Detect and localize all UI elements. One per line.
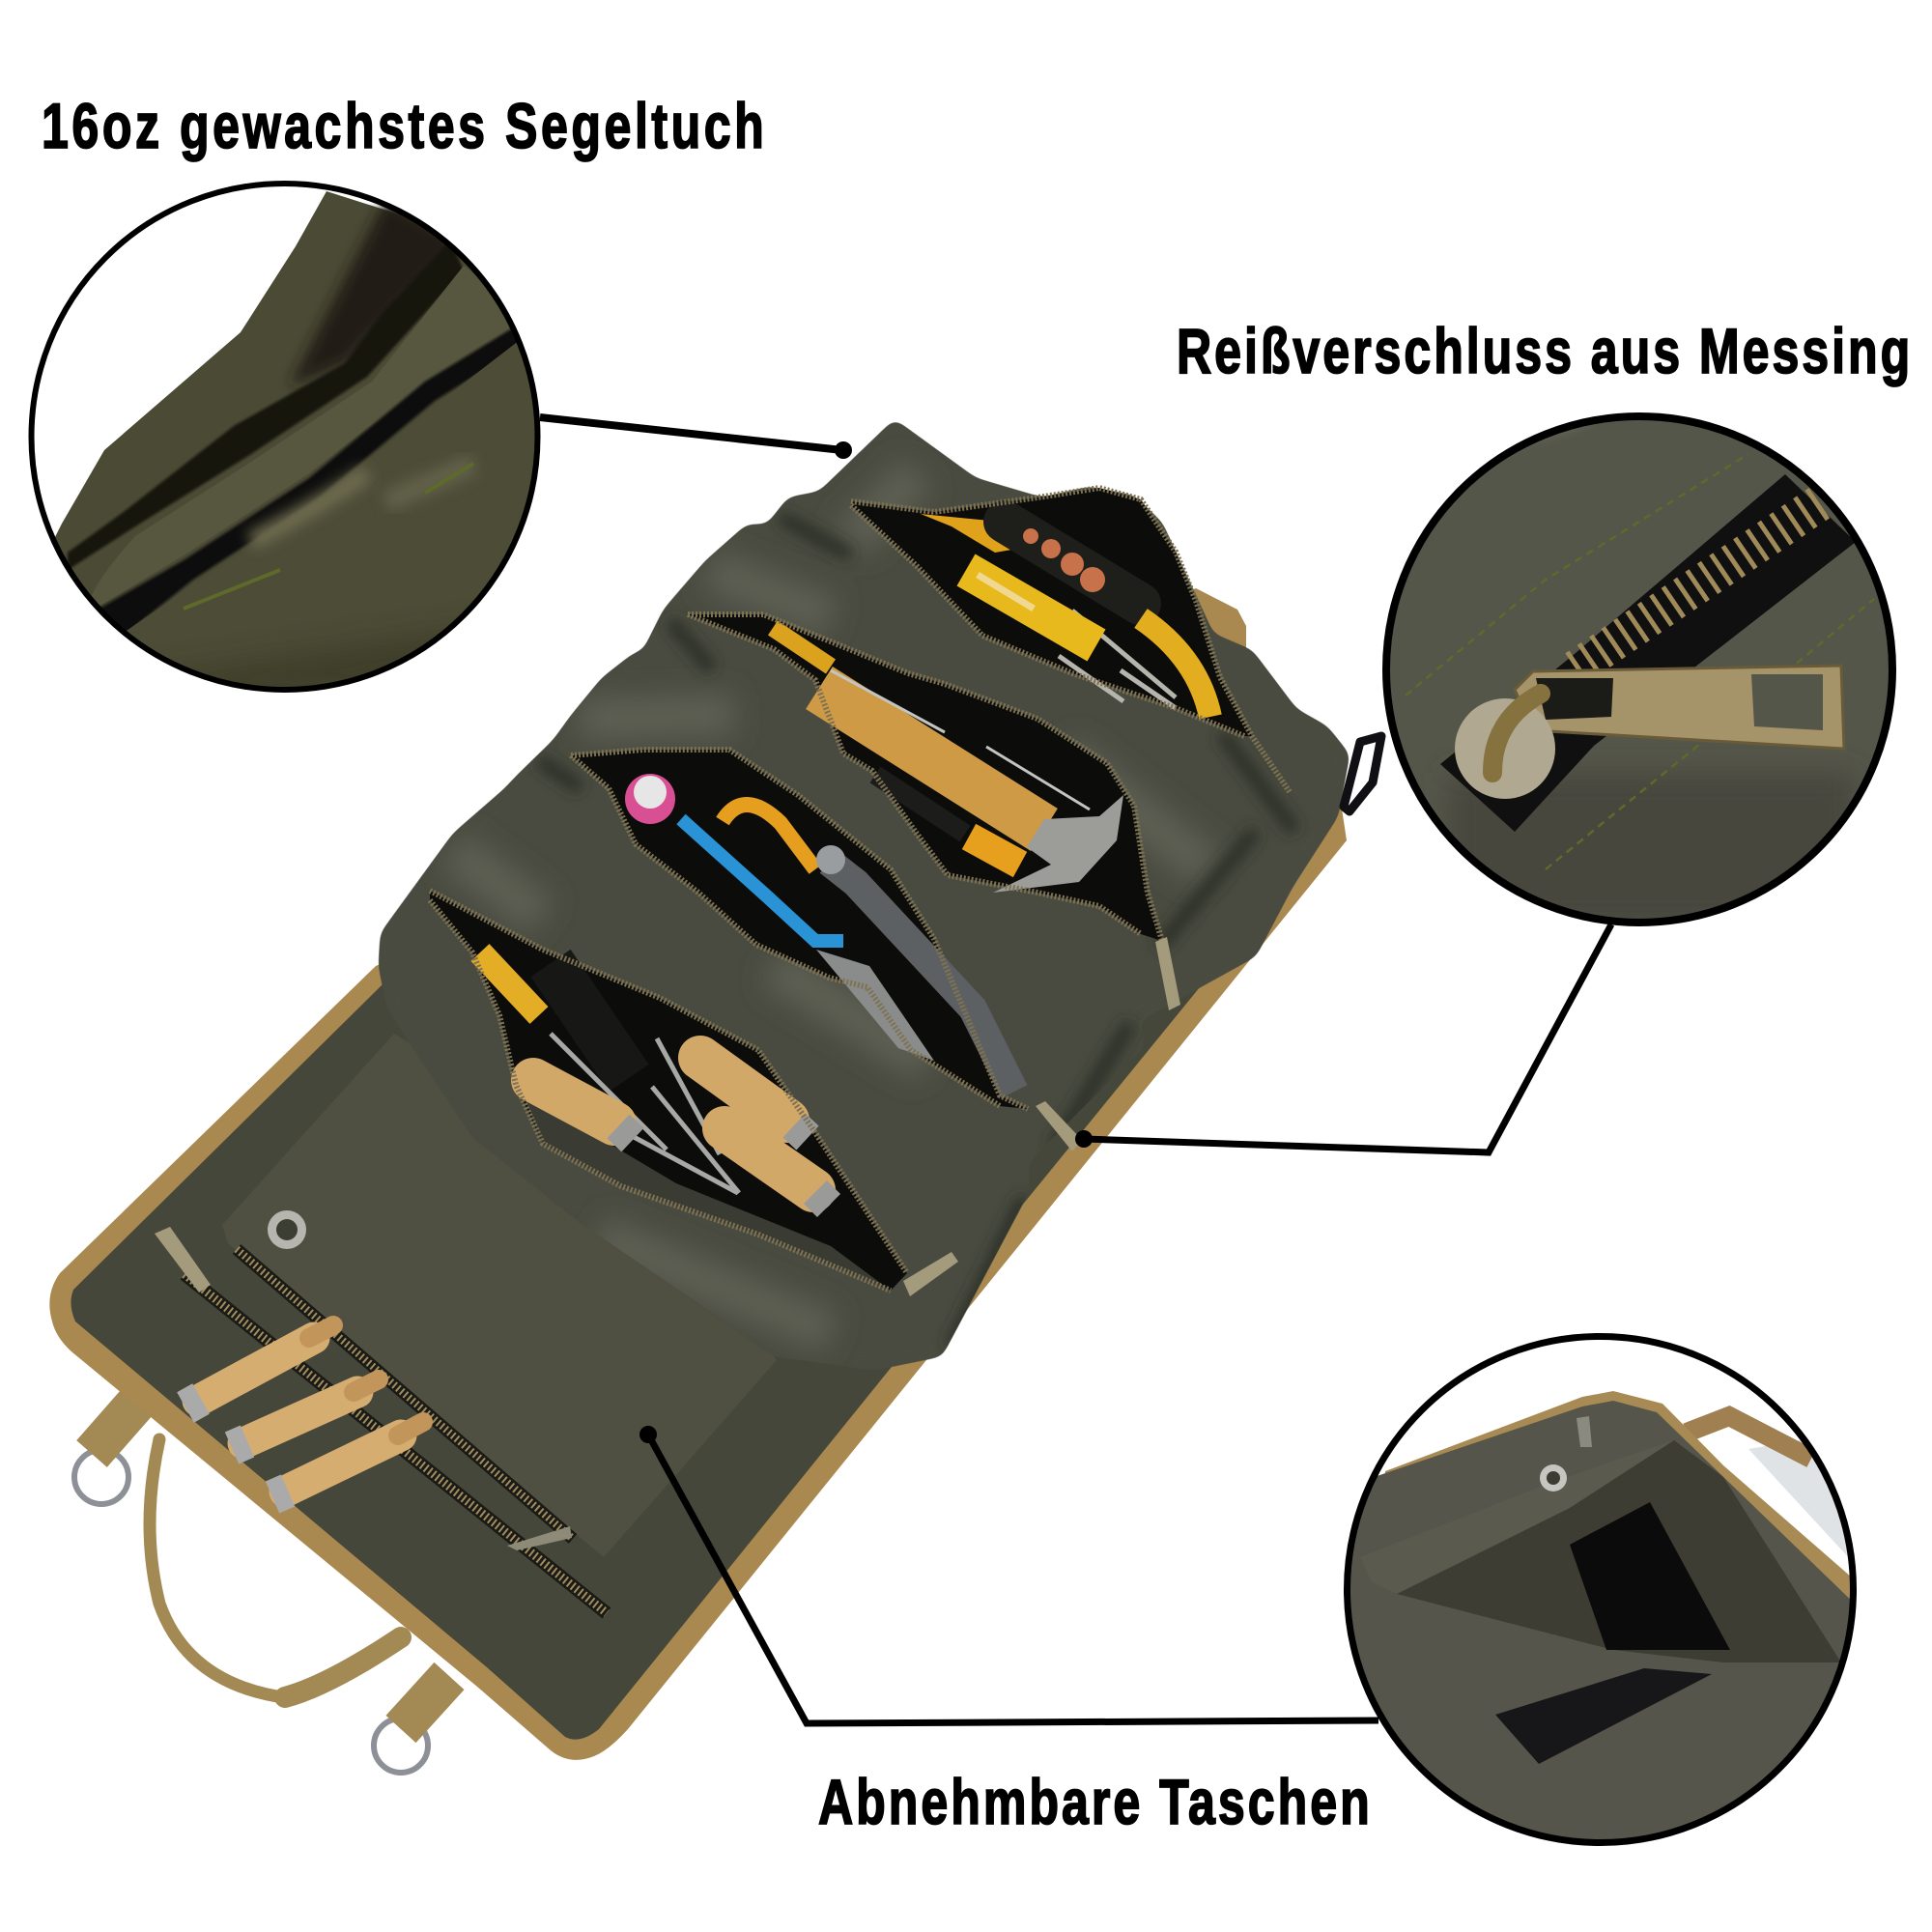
grip spots [1023,528,1105,592]
black handle [875,775,965,834]
yellow tool [773,628,831,667]
pocket underside [1397,1440,1841,1662]
inner lining [522,1092,891,1291]
canvas base panel [71,676,1335,1740]
flat removable pocket [222,1034,777,1557]
steel shafts [1059,611,1176,708]
yellow pliers [1141,618,1210,717]
pocket 4 opening with chisels [430,891,907,1291]
pink spool [625,774,675,824]
steel shafts [551,1034,739,1193]
lower fold [127,342,519,633]
thin drivers [831,670,1090,810]
pocket 3 opening with pliers [571,750,1028,1109]
lower crease [82,328,522,638]
ferrules [618,1125,829,1206]
pocket outer face [1360,1440,1674,1594]
lower zipper edge [430,900,891,1291]
hammer head [993,795,1123,893]
zipper teeth [1576,489,1840,668]
hammer handle [819,688,1044,830]
flat pocket zipper pull [507,1526,572,1550]
circle outline [1386,416,1892,923]
flat pocket zipper [237,1249,573,1539]
slider pull tab [1515,666,1844,749]
back zipper [185,1274,607,1613]
lower shade [1449,773,1855,927]
zipper tape [1440,474,1856,832]
wood handles [533,1058,813,1190]
tan border [1385,1391,1850,1600]
zipper edge [688,614,1162,941]
zipper edge [430,891,907,1273]
zipper edge [571,750,1028,1109]
yellow screwdriver [480,952,539,1015]
black orange-grip screwdriver [1005,522,1140,604]
black handle [551,963,629,1078]
orange grip [723,805,815,869]
circle outline [1347,1337,1853,1843]
lower zipper edge [851,505,1244,736]
stitching [1406,454,1874,869]
circle outline [31,184,537,690]
hanging loop [1344,736,1381,811]
top zipper pull [1577,1416,1592,1447]
lower velcro strip [1495,1668,1712,1764]
highlights [251,473,367,541]
pocket 1 opening with tools [851,488,1290,792]
leader line: zipper [1075,924,1611,1152]
yellow tool top [921,514,1017,553]
title: detachable pockets: Abnehmbare Taschen [818,1767,1370,1838]
upper dark corner [1554,431,1570,436]
white surface top right [1748,1440,1848,1556]
slider ring [1492,694,1541,773]
leader line: pockets [639,1426,1378,1723]
circle: brass zipper detail [1383,414,1895,927]
eyelet [268,1210,306,1249]
inner velcro [1570,1502,1730,1650]
wrench [829,862,1014,1092]
pull tab holes [1536,678,1613,720]
eyelet [1540,1464,1567,1492]
middle fold [87,266,511,613]
upper crease [68,241,464,570]
dark top shade [290,198,464,386]
D-ring left [74,1450,128,1504]
title: 16oz waxed canvas: 16oz gewachstes Segeltuch [42,91,764,162]
D-ring right [374,1719,428,1773]
lower zipper edge [571,755,1000,1106]
chisels [185,1325,423,1497]
circle: waxed canvas detail [29,182,555,696]
scissor blade [816,950,934,1061]
tan border [49,588,1347,1760]
orange collar [969,837,1020,865]
lower zipper edge [688,614,1141,934]
leader line: canvas [540,417,852,459]
yellow screwdriver [966,570,1096,645]
handle strap [150,1439,401,1698]
product: tool roll bag [49,419,1381,1773]
strap tabs [92,1399,449,1729]
slider body [1455,698,1555,799]
zipper pulls on pockets [903,937,1180,1296]
zipper edge [851,488,1290,792]
shaded bottom [193,632,440,687]
blue plier handle [681,819,843,941]
zipper pull [155,1227,211,1293]
canvas lower panel [1343,1401,1860,1855]
pocket 2 opening with hammer [688,614,1162,941]
circle: removable pocket detail [1343,1334,1864,1855]
handle strap [1687,1416,1811,1459]
title: brass zipper: Reißverschluss aus Messing [1177,316,1910,387]
rolled zip pockets silhouette [379,419,1350,1370]
pocket shading [454,473,1294,1348]
canvas fold [55,191,512,630]
